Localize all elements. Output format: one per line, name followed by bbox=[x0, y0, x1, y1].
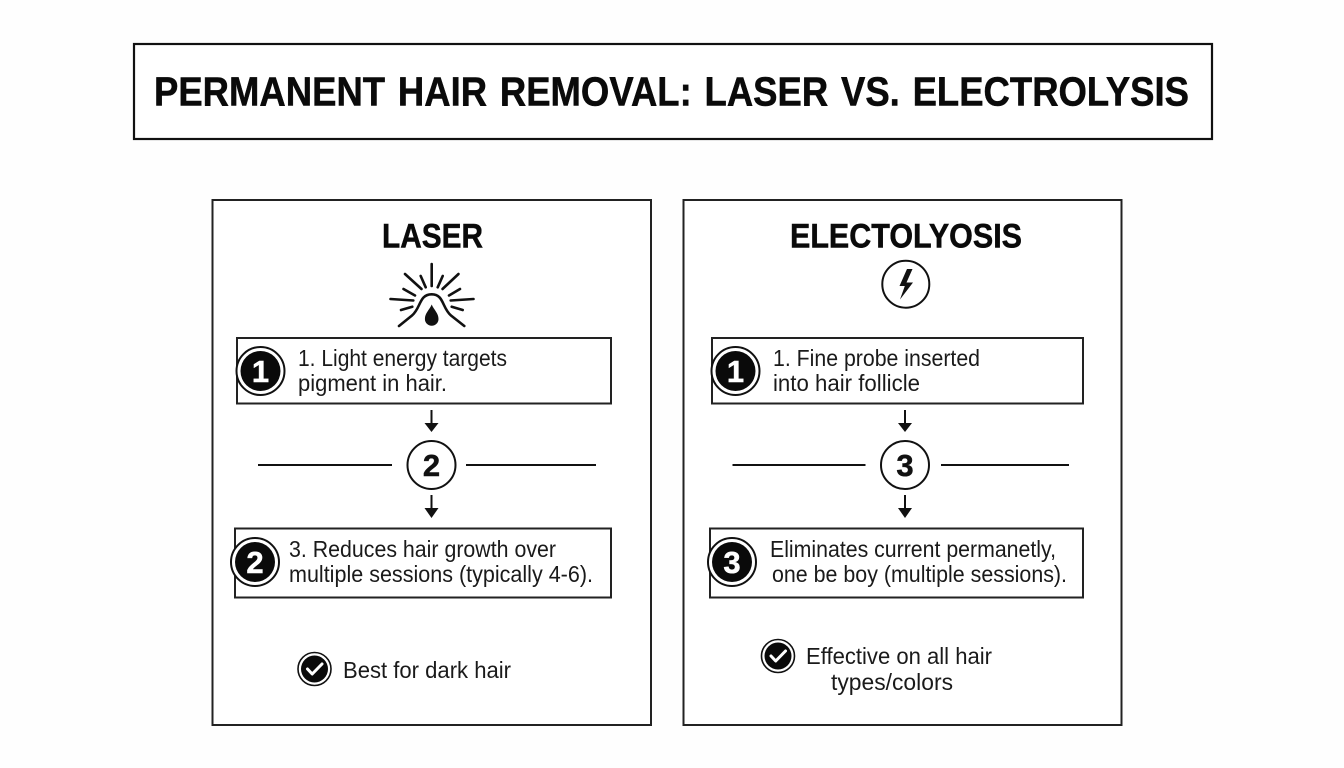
step box: light energy: 1 bbox=[252, 354, 269, 389]
middle step marker 2: 2 bbox=[423, 448, 440, 483]
step box: reduces hair growth bbox=[231, 528, 611, 598]
step box: eliminates current: 3 bbox=[723, 545, 741, 580]
arrow: middle to step 3 bbox=[424, 495, 438, 518]
arrow: step 1 to middle bbox=[898, 410, 912, 432]
callout: best for dark hair bbox=[298, 652, 511, 686]
step box: fine probe: into hair follicle bbox=[773, 370, 920, 396]
callout: effective on all hair types: types/colors bbox=[831, 669, 953, 695]
heading: laser: LASER bbox=[382, 218, 483, 256]
step box: fine probe bbox=[712, 338, 1083, 404]
icon: lightning bolt in circle bbox=[882, 261, 929, 308]
callout: effective on all hair types bbox=[762, 640, 992, 695]
step box: reduces hair growth: multiple sessions (typically 4-6). bbox=[289, 561, 593, 587]
step box: light energy: 1. Light energy targets bbox=[298, 345, 507, 371]
panel: laser bbox=[212, 200, 651, 725]
middle step marker 3 bbox=[732, 441, 1069, 489]
icon: light rays over follicle with pigment drop bbox=[390, 264, 474, 326]
heading: electrolysis: ELECTOLYOSIS bbox=[790, 218, 1022, 256]
step box: eliminates current bbox=[708, 528, 1083, 598]
arrow: middle to step 3 bbox=[898, 495, 912, 518]
callout: best for dark hair: Best for dark hair bbox=[343, 657, 511, 683]
step box: eliminates current: Eliminates current permanetly, bbox=[770, 536, 1056, 562]
title bbox=[134, 44, 1212, 139]
middle step marker 3: 3 bbox=[896, 448, 914, 483]
middle step marker 2 bbox=[258, 441, 596, 489]
step box: light energy bbox=[236, 338, 611, 404]
arrow: step 1 to middle bbox=[424, 410, 438, 432]
step box: eliminates current: one be boy (multiple sessions). bbox=[772, 561, 1067, 587]
step box: fine probe: 1. Fine probe inserted bbox=[773, 345, 980, 371]
step box: reduces hair growth: 3. Reduces hair growth over bbox=[289, 536, 556, 562]
step box: fine probe: 1 bbox=[727, 354, 744, 389]
title: PERMANENT HAIR REMOVAL: LASER VS. ELECTROLYSIS bbox=[154, 69, 1189, 115]
step box: light energy: pigment in hair. bbox=[298, 370, 447, 396]
panel: electrolysis bbox=[684, 200, 1122, 725]
step box: reduces hair growth: 2 bbox=[246, 545, 264, 580]
callout: effective on all hair types: Effective on all hair bbox=[806, 643, 992, 669]
